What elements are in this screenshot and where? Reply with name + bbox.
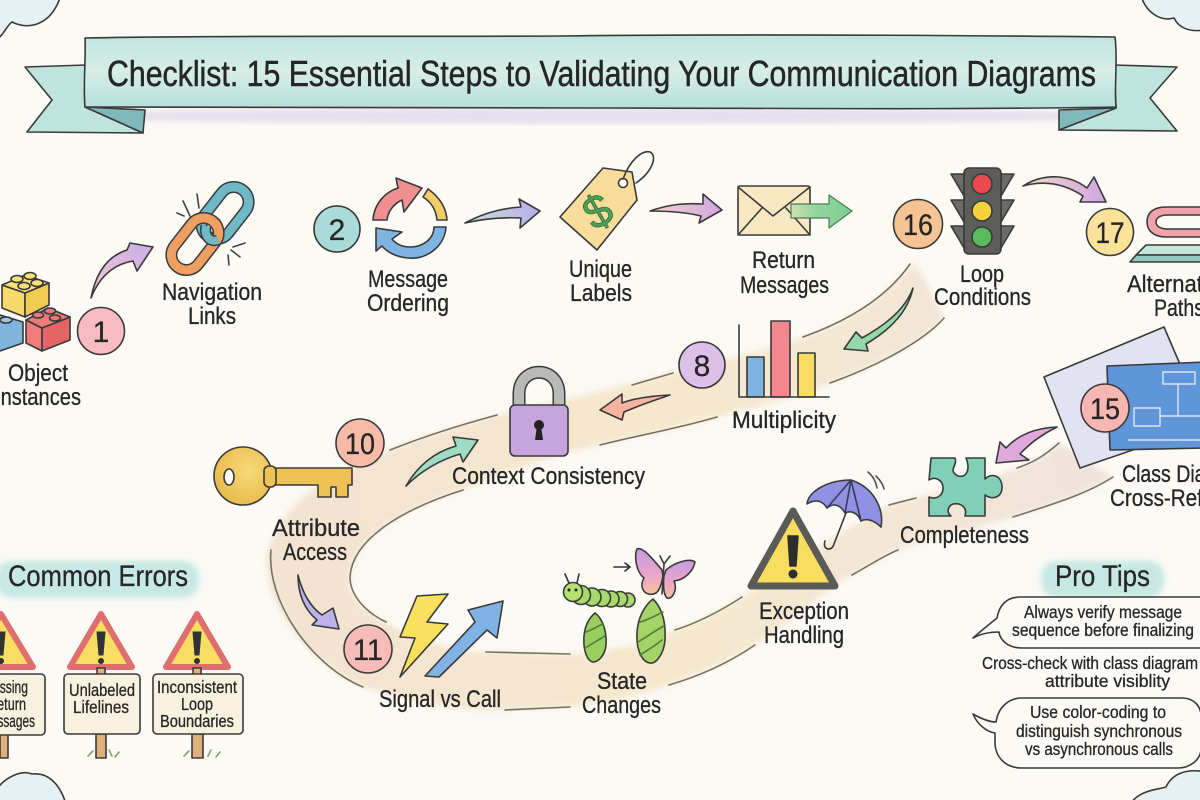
tip bubble 3: vs asynchronous calls: [1025, 739, 1173, 759]
arrow: attribute access to signal: [298, 575, 339, 629]
icon: chain links: [165, 181, 255, 276]
banner body: [84, 35, 1116, 109]
tip bubble 1: Always verify message: [1024, 602, 1182, 622]
badge 16: [894, 200, 942, 248]
label: state changes: State: [597, 668, 647, 695]
cloud: bottom left: [0, 773, 66, 800]
icon: padlock: [510, 372, 568, 456]
heading: pro tips: Pro Tips: [1055, 560, 1150, 593]
badge 10: [336, 419, 384, 467]
icon: blueprint: [1044, 327, 1200, 468]
icon: blue arrow: [425, 601, 503, 677]
label: completeness: Completeness: [900, 522, 1029, 549]
icon: lightning bolt: [400, 594, 448, 677]
badge 8: [679, 342, 725, 388]
cloud: top right: [1141, 0, 1200, 31]
panel: pro tips: [973, 560, 1200, 768]
arrow: 1 to navigation links: [91, 243, 153, 298]
arrow: ordering to labels: [465, 199, 540, 228]
label: navigation links: Navigation: [162, 279, 262, 306]
label: exception handling: Exception: [759, 598, 849, 625]
sign: missing return messages: [0, 614, 45, 758]
step: navigation links: Links: [188, 303, 236, 330]
icon: butterfly: [636, 549, 695, 598]
step: loop conditions: Conditions: [934, 284, 1031, 311]
tip bubble 3: [973, 698, 1200, 768]
tip bubble 3: distinguish synchronous: [1016, 721, 1182, 741]
label: unique labels: Unique: [569, 256, 632, 283]
step: class diagram cross-reference: [1044, 327, 1200, 512]
sign: inconsistent loop boundaries: [153, 614, 243, 758]
arrow: multiplicity to context consistency: [600, 394, 670, 420]
sign: inconsistent loop boundaries: Boundaries: [160, 711, 234, 731]
step: exception handling: Handling: [764, 622, 844, 649]
step: exception handling: [751, 472, 884, 649]
step: message ordering: Ordering: [367, 290, 449, 317]
sign: unlabeled lifelines: Lifelines: [73, 697, 129, 717]
step: object instances: [0, 272, 70, 387]
icon: caterpillar: [564, 574, 635, 607]
step: multiplicity: [732, 321, 836, 434]
badge 2: 2: [329, 214, 345, 247]
sign: unlabeled lifelines: Unlabeled: [69, 680, 135, 700]
label: message ordering: Message: [368, 266, 448, 293]
sign: inconsistent loop boundaries: Inconsistent: [157, 677, 237, 697]
banner left tail: [25, 65, 143, 133]
heading: common errors: Common Errors: [8, 560, 188, 593]
badge 16: 16: [903, 209, 933, 242]
label: object instances: Object: [8, 360, 68, 387]
icon: key: [214, 447, 352, 505]
step: state changes: Changes: [582, 692, 661, 719]
icon: cocoon left: [584, 613, 606, 662]
step: return messages: [738, 186, 852, 299]
cloud: top left: [0, 0, 60, 40]
icon: puzzle piece: [929, 458, 1002, 516]
step: message ordering: [367, 178, 449, 317]
title banner: [25, 35, 1177, 133]
icon: price tag: $: [573, 182, 622, 240]
icon: cocoon right: [637, 599, 665, 663]
icon: toy blocks: [0, 272, 70, 351]
step: return messages: Messages: [740, 272, 829, 299]
step: attribute access: Access: [283, 539, 347, 566]
badge 11: 11: [353, 634, 383, 667]
icon: small arrow: [614, 563, 630, 571]
icon: bar chart: [739, 321, 829, 397]
badge 11: [344, 625, 392, 673]
arrow: loop to alternative paths: [1023, 177, 1106, 202]
tip bubble 1: [973, 597, 1200, 648]
badge 17: 17: [1096, 217, 1124, 250]
arrow: class diagram to completeness: [996, 427, 1057, 463]
icon: traffic light: [951, 168, 1014, 254]
badge 15: [1081, 384, 1129, 432]
label: return messages: Return: [752, 247, 815, 274]
step: state changes: [564, 549, 695, 719]
icon: envelope with arrow: [738, 186, 852, 235]
tip 2: [982, 653, 1198, 691]
step: unique labels: Labels: [570, 280, 632, 307]
icon: warning triangle: [751, 511, 835, 586]
badge 1: [78, 308, 124, 354]
badge 10: 10: [345, 428, 375, 461]
tip bubble 3: Use color-coding to: [1030, 702, 1166, 722]
label: attribute access: Attribute: [272, 515, 360, 542]
step: context consistency: [452, 372, 645, 490]
badge 8: 8: [694, 350, 710, 383]
tip 2: attribute visiblity: [1045, 671, 1170, 691]
badge 2: [314, 206, 360, 252]
arrow: attribute access to context consistency: [406, 437, 478, 486]
label: context consistency: Context Consistency: [452, 463, 645, 490]
banner right fold: [1059, 108, 1116, 130]
badge 17: [1086, 208, 1134, 256]
cloud: bottom right: [1130, 771, 1200, 800]
step: signal vs call: [379, 594, 503, 713]
step: completeness: [900, 458, 1029, 549]
panel: common errors: [0, 560, 243, 758]
badge 1: 1: [93, 316, 109, 349]
icon: books: [1130, 207, 1200, 262]
banner left fold: [85, 107, 145, 133]
step: navigation links: [162, 181, 262, 330]
step: alternative paths: [1127, 207, 1200, 322]
winding path ribbon: [267, 262, 1113, 710]
label: multiplicity: Multiplicity: [732, 407, 836, 434]
icon: price tag: [560, 152, 654, 250]
step: attribute access: [214, 447, 360, 566]
banner right tail: [1059, 65, 1177, 131]
arrow: loop to multiplicity: [844, 288, 913, 351]
icon: cycle arrows: [373, 178, 447, 258]
step: unique labels: [560, 152, 654, 307]
step: loop conditions: [934, 168, 1031, 311]
icon: umbrella: [807, 472, 884, 549]
sign: unlabeled lifelines: [64, 614, 140, 758]
label: signal vs call: Signal vs Call: [379, 686, 501, 713]
sign: inconsistent loop boundaries: Loop: [181, 694, 213, 714]
badge 15: 15: [1090, 393, 1120, 426]
arrow: labels to return messages: [650, 194, 722, 223]
label: loop conditions: Loop: [960, 261, 1004, 288]
